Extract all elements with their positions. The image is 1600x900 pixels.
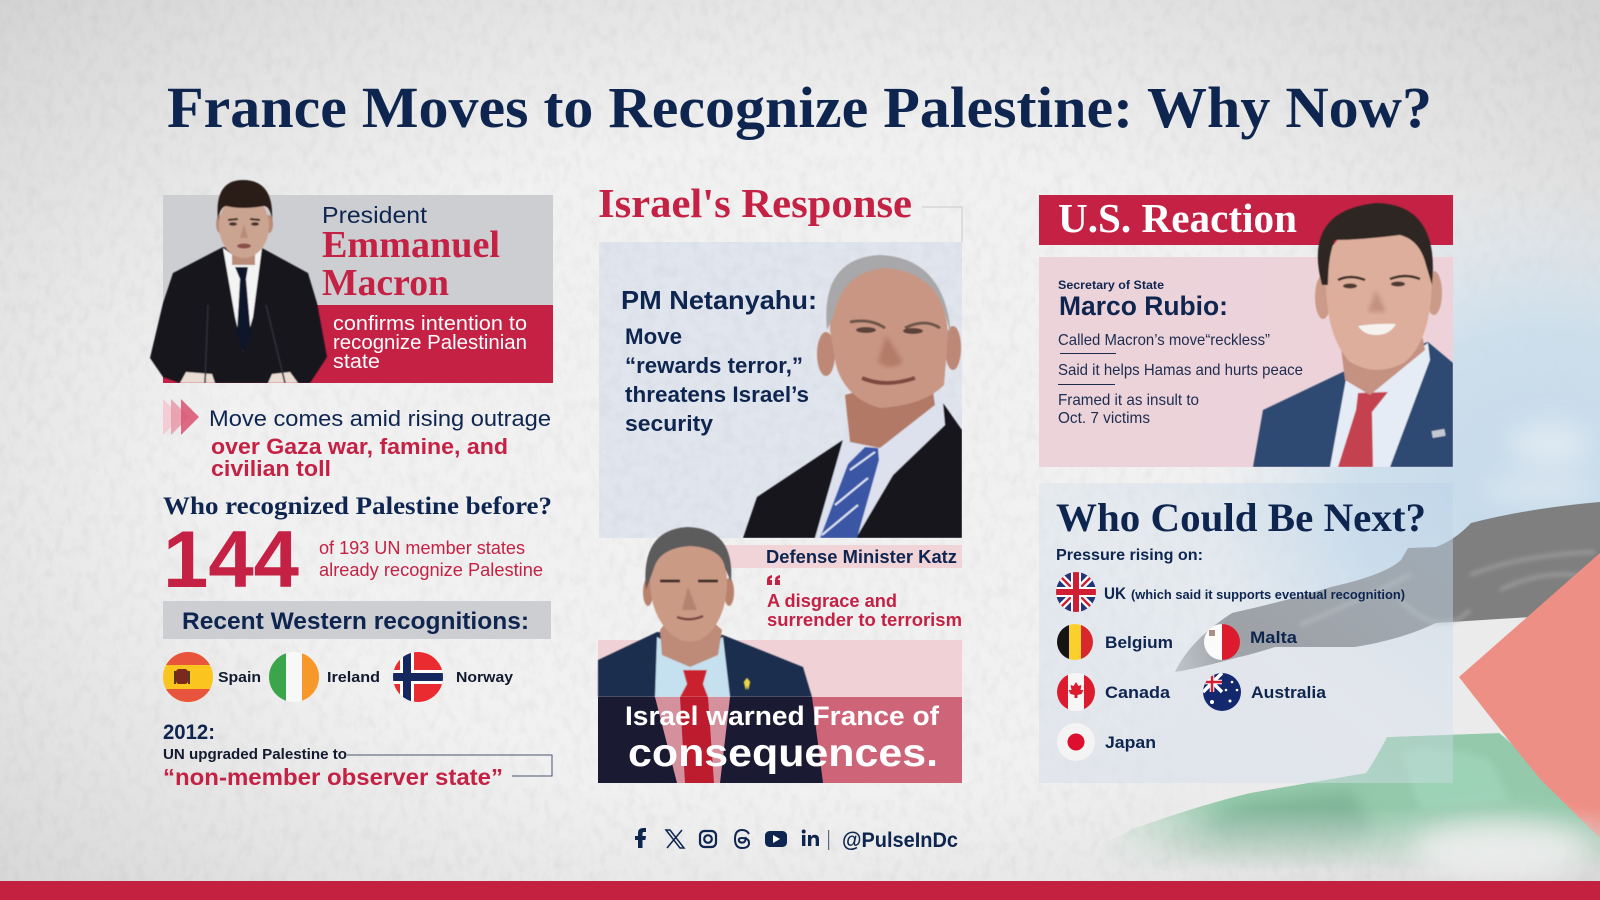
icon: linkedin [802,830,819,846]
label: Canada: Canada [1105,683,1171,702]
recent recognitions flags: Ireland [327,669,380,686]
icon: triple arrow [163,399,199,435]
panel: Netanyahu [599,242,962,538]
flag: Norway [393,652,443,702]
Rubio text [1058,278,1303,427]
lower figure darkened by band [598,697,823,783]
Rubio text: Called Macron’s move“reckless” [1058,332,1270,349]
flag: Malta [1204,624,1240,660]
flag: Canada [1057,673,1095,711]
portrait: Israel Katz [598,527,812,697]
label: Malta: Malta [1250,628,1298,647]
main title: France Moves to Recognize Palestine: Why Now? [167,75,1432,140]
label: UK: UK [1104,585,1126,603]
Rubio text: Secretary of State [1058,278,1164,292]
heading: U.S. Reaction: U.S. Reaction [1058,195,1297,241]
panel: Katz [598,527,962,783]
Netanyahu quote: PM Netanyahu: [621,285,817,315]
text block: outrage context: civilian toll [211,456,331,481]
callout: warned France: consequences. [628,732,938,775]
label: Belgium: Belgium [1105,633,1173,652]
Netanyahu quote: security [625,411,714,436]
text block: 2012 UN upgrade: “non-member observer state” [163,764,503,790]
label: Australia: Australia [1251,683,1327,702]
name and statement text: state [333,350,380,373]
Katz quote: Defense Minister Katz [766,547,957,567]
stat: 144 UN member states [163,515,543,605]
separator and handle: @PulseInDc [842,829,958,852]
panel: U.S. Reaction [1039,195,1453,467]
Katz quote: surrender to terrorism [767,610,962,630]
social media row [635,828,958,852]
name and statement text: Emmanuel [322,224,500,266]
label: Japan: Japan [1105,733,1156,752]
subheading: pressure rising: Pressure rising on: [1056,547,1203,564]
flag: Ireland [269,652,319,702]
red heading bar [1039,195,1453,245]
text block: 2012 UN upgrade: 2012: [163,721,215,744]
stat: 144 UN member states: 144 [163,515,299,605]
label: UK: (which said it supports eventual recognition) [1131,588,1405,602]
heading: who recognized: Who recognized Palestine before? [163,493,552,520]
banner: recent Western recognitions: Recent Western recognitions: [182,608,529,635]
bottom red bar [0,881,1600,900]
name and statement text: recognize Palestinian [333,331,527,354]
name and statement text [322,202,527,373]
text block: outrage context: Move comes amid rising outrage [209,406,551,431]
Palestinian flag backdrop [1090,502,1600,900]
text block: 2012 UN upgrade: UN upgraded Palestine to [163,746,347,763]
recent recognitions flags: Norway [456,669,514,686]
panel: Macron announcement [150,180,553,383]
name and statement text: confirms intention to [333,312,527,335]
Netanyahu quote: Move [625,324,682,349]
flag: Spain [163,652,213,702]
icon: instagram [700,831,716,847]
Rubio text: Framed it as insult to [1058,392,1199,409]
callout: warned France: Israel warned France of [625,701,940,731]
red statement block [163,305,553,383]
Netanyahu quote [621,285,817,436]
portrait: Emmanuel Macron [150,180,327,383]
portrait: Marco Rubio [1253,203,1453,467]
icon: youtube [765,831,787,847]
heading: Israel's Response [598,180,962,242]
panel: Who Could Be Next [1039,483,1453,783]
Rubio text: Said it helps Hamas and hurts peace [1058,362,1303,379]
grey name block [163,195,553,305]
banner: recent Western recognitions [163,601,551,639]
Netanyahu quote: “rewards terror,” [625,353,803,378]
Rubio text: Marco Rubio: [1059,291,1228,321]
pink body [1039,257,1453,467]
Katz quote: A disgrace and [767,591,897,611]
name and statement text: Macron [322,262,449,304]
recent recognitions flags: Spain [218,669,261,686]
pink band [598,640,962,697]
Katz quote [766,547,962,630]
text block: 2012 UN upgrade [163,721,552,790]
name and statement text: President [322,202,428,228]
name strip [720,545,962,568]
heading: Who Could Be Next: Who Could Be Next? [1056,495,1426,540]
icon: facebook [635,828,646,848]
callout: warned France [625,701,940,775]
portrait: Benjamin Netanyahu [743,255,962,538]
rose band [598,697,962,783]
heading: Israel's Response: Israel's Response [598,180,912,226]
flag: Japan [1057,723,1095,761]
text block: outrage context [209,406,551,481]
recent recognitions flags [163,652,514,702]
Netanyahu quote: threatens Israel’s [625,382,809,407]
Rubio text: Oct. 7 victims [1058,410,1150,427]
flag: Belgium [1057,624,1093,660]
stat: 144 UN member states: of 193 UN member states [319,538,525,558]
text block: outrage context: over Gaza war, famine, and [211,434,508,459]
flag: UK [1056,572,1096,612]
icon: threads [735,830,749,848]
icon: X [666,830,684,848]
stat: 144 UN member states: already recognize Palestine [319,560,543,580]
flag: Australia [1203,673,1241,711]
label: UK [1104,585,1405,603]
